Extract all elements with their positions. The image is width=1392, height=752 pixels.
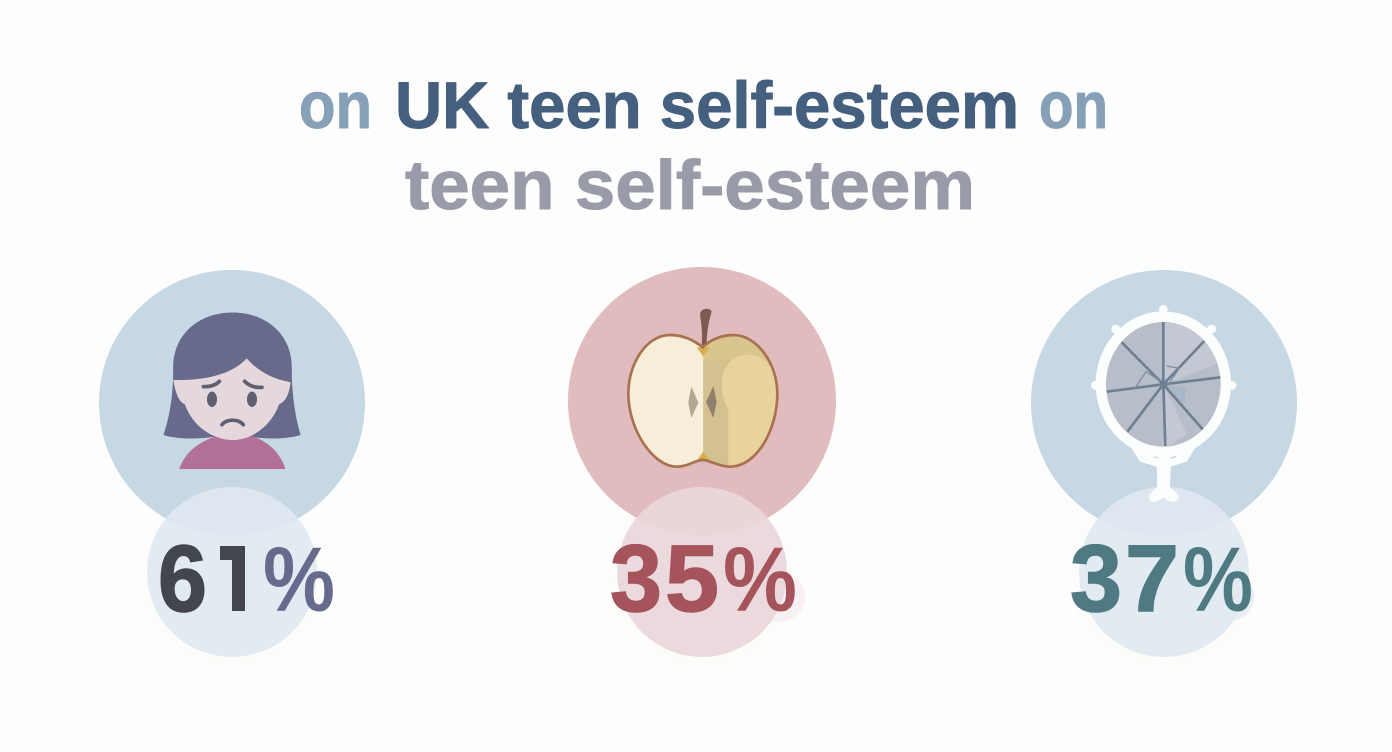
stat: 37%: 3 [1070,526,1122,632]
stat: 61%: 6 [158,526,207,632]
percentage circle [1079,487,1249,657]
title line two: teen self-esteem [405,146,975,224]
large circle [568,267,836,535]
stat: 61%: % [263,529,335,631]
percentage circle [147,487,317,657]
soft halo [616,489,788,661]
title line one: on [1039,68,1108,142]
title line one: on [299,68,372,142]
icon: cracked mirror [1091,305,1236,502]
title line one: UK teen self-esteem [395,68,1019,142]
stat: 35% [610,526,797,632]
large circle [99,270,365,536]
soft halo [1078,489,1250,661]
panel: sad girl 61% [99,270,365,661]
stat: 37%: % [1183,529,1253,631]
stat: 35%: 5 [665,526,719,632]
panel: apple 35% [568,267,836,661]
stat: 61%: 1 [214,526,250,632]
panel: broken mirror 37% [1031,270,1297,661]
icon: halved apple [627,309,780,468]
stat: 35%: 3 [610,526,662,632]
percentage circle [617,487,787,657]
soft halo [146,489,318,661]
large circle [1031,270,1297,536]
stat: 37%: 7 [1125,526,1179,632]
stat: 35%: % [723,529,797,631]
icon: sad girl [163,313,301,469]
stat: 37% [1070,526,1253,632]
title [299,68,1108,224]
stat: 61% [160,544,333,613]
